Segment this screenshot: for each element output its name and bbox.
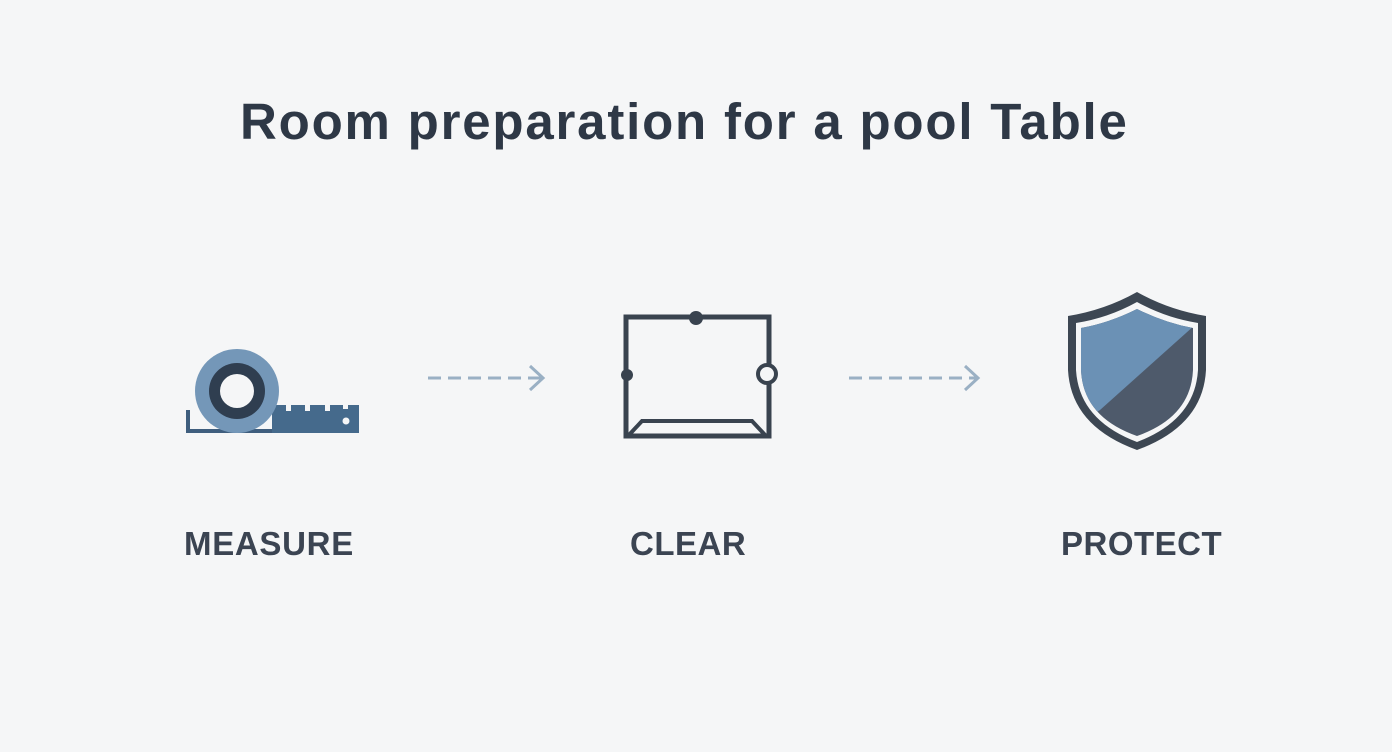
icon: shield [1068,292,1210,450]
icon: tape measure [188,349,359,433]
label: measure: MEASURE [184,525,354,562]
arrow 2 [849,366,978,390]
label: clear: CLEAR [630,525,746,562]
label: protect: PROTECT [1061,525,1222,562]
arrow 1 [428,366,543,390]
icons and arrows [186,292,1206,450]
icon: clear room [621,311,776,436]
title: Room preparation for a pool Table [240,93,1129,150]
